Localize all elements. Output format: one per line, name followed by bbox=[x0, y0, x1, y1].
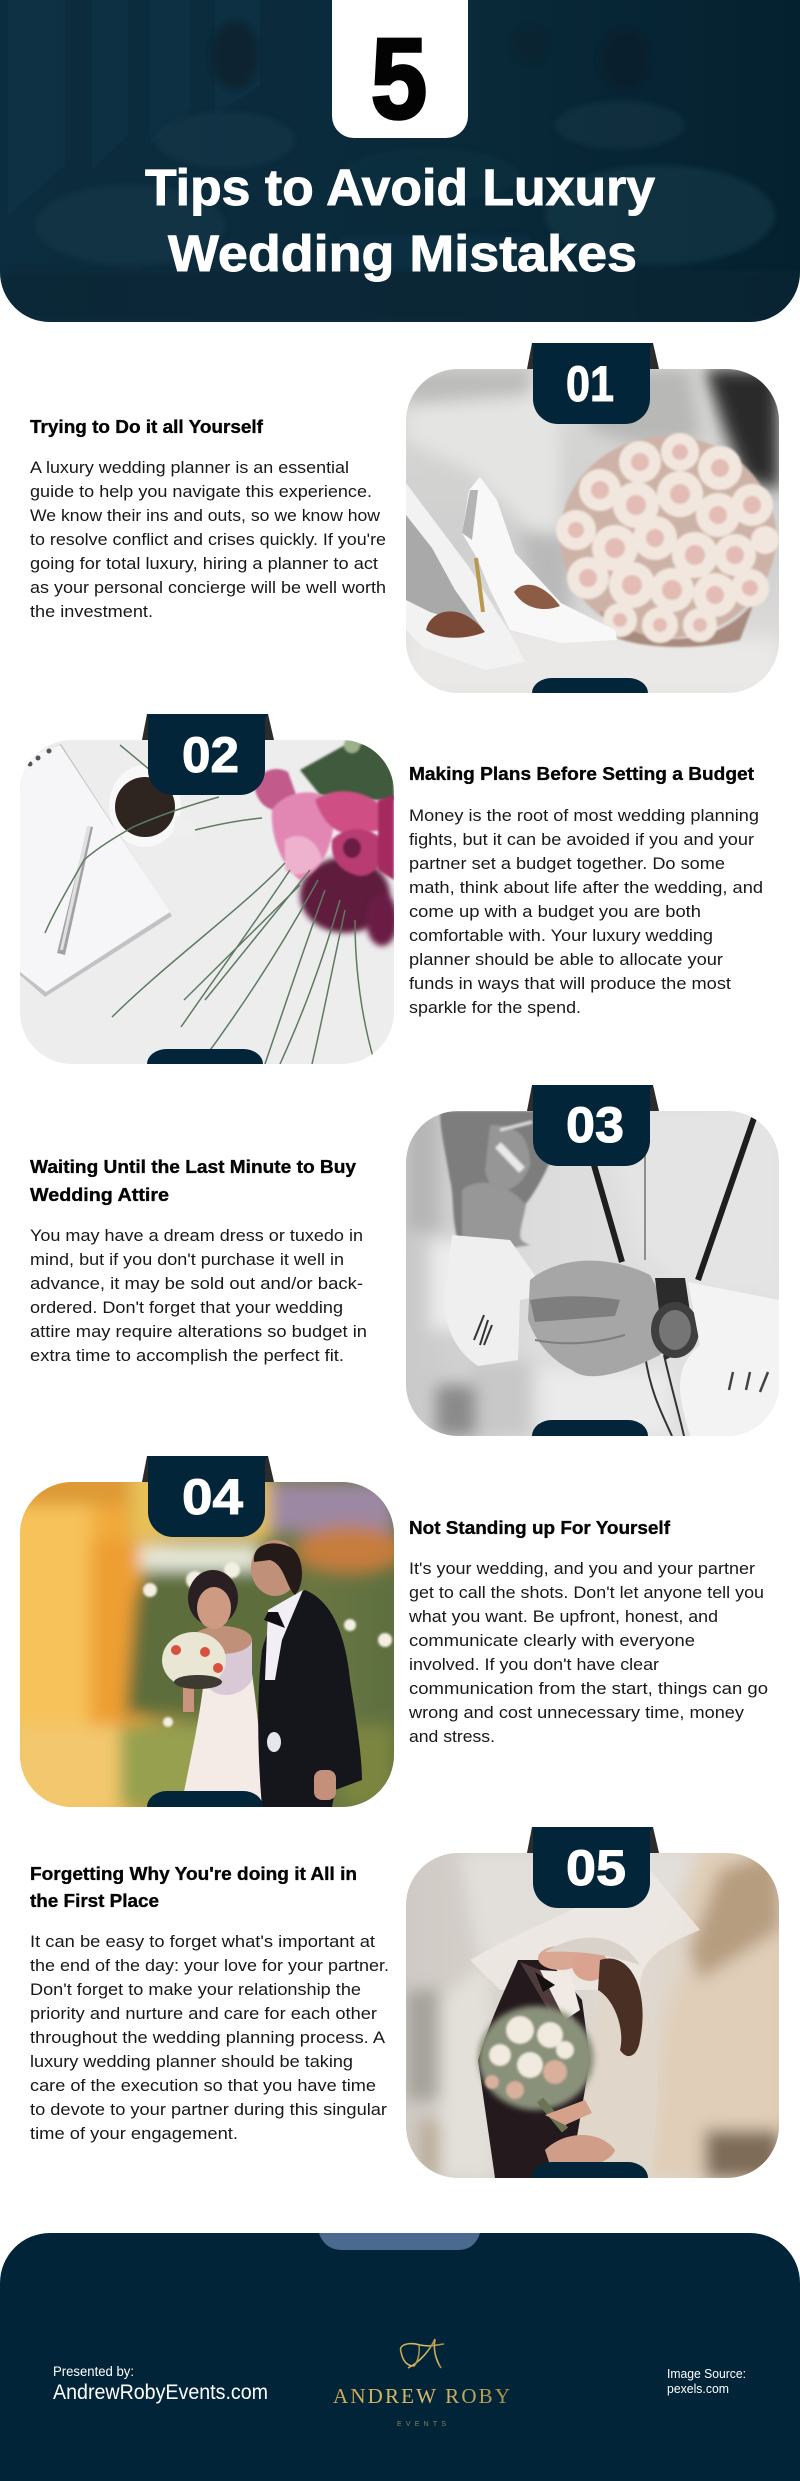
heading: tip 3 bbox=[30, 1156, 357, 1205]
logo subtitle: EVENTS bbox=[397, 2421, 446, 2428]
text block: tip 4: communication from the start, things can go bbox=[409, 1680, 768, 1698]
image source text: Image Source: bbox=[667, 2367, 746, 2381]
text block: tip 5 bbox=[30, 1933, 389, 2143]
bouquet bbox=[478, 2006, 594, 2130]
text block: tip 4: and stress. bbox=[409, 1728, 495, 1746]
text block: tip 3: ordered. Don't forget that your wedding bbox=[30, 1299, 343, 1317]
notebook bbox=[20, 744, 172, 997]
presented by text: Presented by: bbox=[53, 2364, 134, 2379]
text block: tip 2: funds in ways that will produce the most bbox=[409, 975, 731, 993]
text block: tip 3: mind, but if you don't purchase it well in bbox=[30, 1251, 344, 1269]
text block: tip 1: as your personal concierge will be well worth bbox=[30, 579, 386, 597]
big number card bbox=[332, 0, 468, 143]
text block: tip 2 bbox=[409, 807, 763, 1017]
main title: Tips to Avoid Luxury bbox=[145, 159, 656, 216]
heading: tip 5: the First Place bbox=[30, 1890, 159, 1911]
bouquet bbox=[162, 1632, 226, 1689]
heading: tip 3: Wedding Attire bbox=[30, 1184, 169, 1205]
text block: tip 1: to resolve conflict and crises quickly. If you're bbox=[30, 531, 386, 549]
text block: tip 2: planner should be able to allocate your bbox=[409, 951, 724, 969]
text block: tip 4: wrong and cost unnecessary time, money bbox=[408, 1704, 745, 1722]
shirt cuff bbox=[448, 1235, 535, 1366]
right sleeve bbox=[680, 1282, 779, 1436]
wristwatch bbox=[651, 1278, 699, 1360]
white shoes bbox=[406, 477, 617, 670]
bouquet bbox=[556, 433, 779, 647]
bottom tab bbox=[147, 1791, 263, 1807]
text block: tip 5: luxury wedding planner should be taking bbox=[30, 2053, 353, 2071]
text block: tip 1 bbox=[30, 459, 386, 621]
text block: tip 1: A luxury wedding planner is an essential bbox=[30, 459, 349, 477]
jacket lapel stripes bbox=[594, 1118, 754, 1436]
heading: tip 4: Not Standing up For Yourself bbox=[409, 1517, 671, 1538]
hair bbox=[598, 1958, 643, 2056]
number tag 01: 01 bbox=[566, 356, 614, 412]
text block: tip 5: Don't forget to make your relationship the bbox=[30, 1981, 361, 1999]
heading: tip 1: Trying to Do it all Yourself bbox=[30, 416, 264, 437]
text block: tip 3 bbox=[30, 1227, 367, 1365]
heading: tip 2: Making Plans Before Setting a Budget bbox=[409, 763, 754, 784]
text block: tip 4: It's your wedding, and you and your partner bbox=[409, 1560, 756, 1578]
photo: couple kissing under veil bbox=[406, 1850, 779, 2178]
text block: tip 2: comfortable with. Your luxury wedding bbox=[409, 927, 713, 945]
text block: tip 1: going for total luxury, hiring a planner to act bbox=[30, 555, 378, 573]
text block: tip 1: We know their ins and outs, so we know how bbox=[30, 507, 380, 525]
number tag 03 bbox=[527, 1085, 659, 1166]
text block: tip 1: the investment. bbox=[30, 603, 153, 621]
text block: tip 2: fights, but it can be avoided if you and your bbox=[409, 831, 755, 849]
photo: groom adjusting cufflinks (black and white) bbox=[406, 1111, 779, 1436]
hands bbox=[545, 2100, 592, 2125]
text block: tip 4: communicate clearly with everyone bbox=[409, 1632, 695, 1650]
number tag 05 bbox=[527, 1827, 659, 1908]
groom bbox=[251, 1540, 362, 1807]
number tag 03: 03 bbox=[566, 1097, 624, 1153]
faces bbox=[538, 1946, 582, 1970]
text block: tip 2: come up with a budget you are both bbox=[409, 903, 701, 921]
number tag 04 bbox=[142, 1456, 274, 1537]
text block: tip 5: It can be easy to forget what's important at bbox=[30, 1933, 375, 1951]
text block: tip 4 bbox=[408, 1560, 768, 1746]
text block: tip 1: guide to help you navigate this experience. bbox=[30, 483, 372, 501]
text block: tip 3: extra time to accomplish the perfect fit. bbox=[30, 1347, 344, 1365]
text block: tip 2: Money is the root of most wedding planning bbox=[409, 807, 759, 825]
veil top bbox=[545, 1938, 640, 1965]
grass stems bbox=[45, 745, 375, 1064]
main title bbox=[145, 159, 656, 282]
panel: tip 5 bbox=[30, 1827, 779, 2178]
photo: notebook, coffee and pink roses bbox=[20, 737, 398, 1064]
footer notch bbox=[319, 2233, 480, 2250]
main title: Wedding Mistakes bbox=[168, 225, 637, 282]
veil bbox=[470, 1870, 700, 1990]
groom suit bbox=[478, 1960, 590, 2178]
text block: tip 2: partner set a budget together. Do some bbox=[409, 855, 725, 873]
number tag 01 bbox=[527, 343, 659, 424]
bottom tab bbox=[532, 2162, 648, 2178]
bride bbox=[183, 1570, 262, 1801]
panel: tip 3 bbox=[30, 1085, 779, 1436]
photo: bridal shoes and rose bouquet bbox=[406, 369, 779, 693]
panel: tip 2 bbox=[20, 714, 763, 1064]
background photo: dark wedding reception hall bbox=[0, 0, 800, 322]
bottom tab bbox=[147, 1049, 263, 1064]
text block: tip 2: math, think about life after the wedding, and bbox=[409, 879, 763, 897]
text block: tip 5: care of the execution so that you have time bbox=[30, 2077, 376, 2095]
text block: tip 4: get to call the shots. Don't let anyone tell you bbox=[409, 1584, 764, 1602]
text block: tip 5: priority and nurture and care for each other bbox=[30, 2005, 378, 2023]
text block: tip 3: You may have a dream dress or tuxedo in bbox=[30, 1227, 363, 1245]
logo wordmark: ANDREW ROBY bbox=[333, 2384, 510, 2408]
image source text bbox=[667, 2367, 746, 2396]
header banner bbox=[0, 0, 800, 322]
heading: tip 3: Waiting Until the Last Minute to Buy bbox=[30, 1156, 357, 1177]
number tag 05: 05 bbox=[566, 1840, 626, 1896]
photo: bride and groom in garden bbox=[20, 1482, 394, 1807]
monogram icon bbox=[401, 2339, 444, 2368]
text block: tip 4: what you want. Be upfront, honest, and bbox=[408, 1608, 718, 1626]
big number card: 5 bbox=[371, 16, 427, 143]
footer panel bbox=[0, 2233, 800, 2481]
presented by text bbox=[53, 2364, 268, 2404]
text block: tip 5: time of your engagement. bbox=[30, 2125, 238, 2143]
number tag 02: 02 bbox=[182, 727, 239, 783]
bottom tab bbox=[532, 678, 648, 693]
number tag 02 bbox=[142, 714, 274, 795]
right hand bbox=[528, 1261, 665, 1376]
roses bbox=[255, 737, 398, 946]
text block: tip 3: attire may require alterations so budget in bbox=[30, 1323, 367, 1341]
heading: tip 5: Forgetting Why You're doing it All in bbox=[30, 1863, 357, 1884]
left hand and wrist bbox=[439, 1111, 550, 1248]
text block: tip 5: the end of the day: your love for your partner. bbox=[30, 1957, 389, 1975]
number tag 04: 04 bbox=[182, 1469, 243, 1525]
bottom tab bbox=[532, 1420, 648, 1436]
image source text: pexels.com bbox=[667, 2382, 729, 2396]
logo: Andrew Roby Events bbox=[333, 2339, 510, 2428]
coffee cup bbox=[109, 765, 181, 847]
presented by text: AndrewRobyEvents.com bbox=[53, 2381, 268, 2404]
text block: tip 5: to devote to your partner during this singular bbox=[30, 2101, 388, 2119]
text block: tip 3: advance, it may be sold out and/or back- bbox=[30, 1275, 363, 1293]
dress bbox=[600, 1995, 639, 2163]
text block: tip 2: sparkle for the spend. bbox=[409, 999, 581, 1017]
panel: tip 1 bbox=[30, 343, 779, 693]
text block: tip 4: involved. If you don't have clear bbox=[409, 1656, 660, 1674]
text block: tip 5: throughout the wedding planning process. A bbox=[30, 2029, 385, 2047]
heading: tip 5 bbox=[30, 1863, 357, 1911]
panel: tip 4 bbox=[10, 1456, 768, 1820]
